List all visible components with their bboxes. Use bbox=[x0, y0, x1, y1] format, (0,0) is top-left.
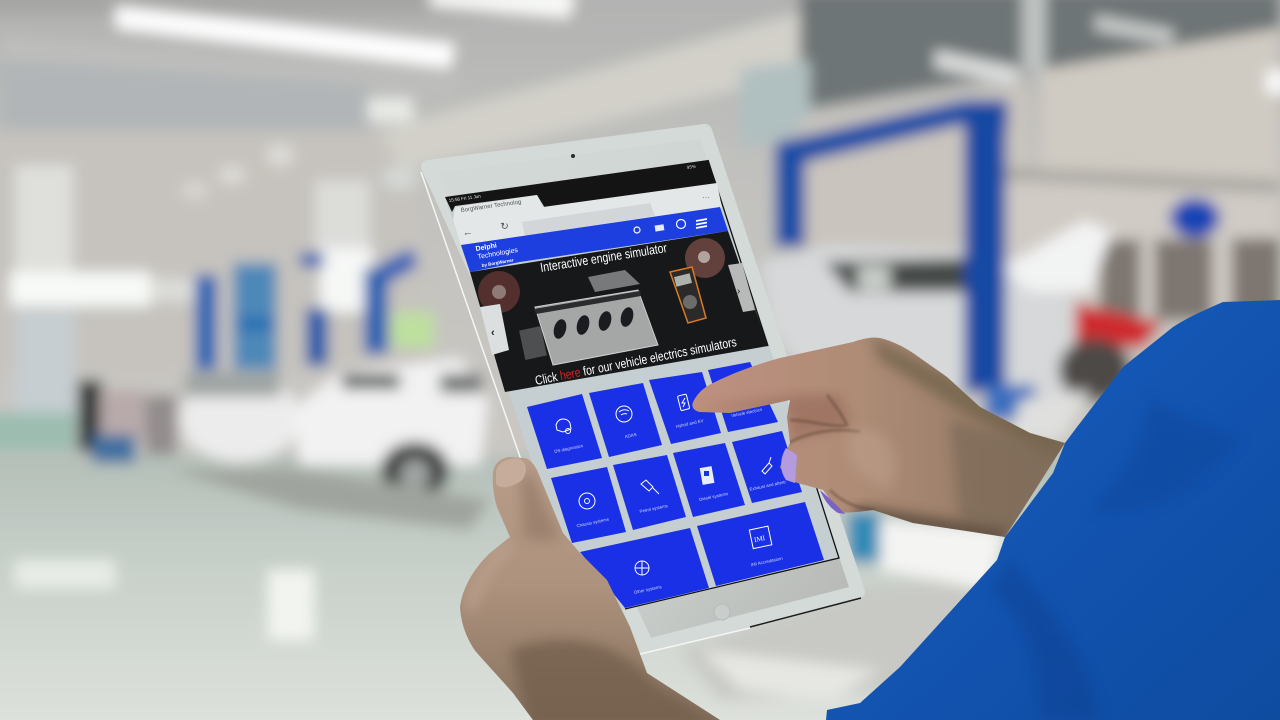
menu tile: Other systems: Other systems bbox=[633, 584, 663, 595]
menu tile: DS diagnostics: DS diagnostics bbox=[554, 443, 584, 454]
browser chrome: ··· bbox=[702, 193, 710, 202]
menu tile: Exhaust and aftertreatment: Exhaust and aftertr bbox=[749, 479, 787, 492]
wrist hair tone bbox=[950, 420, 1060, 535]
status bar: 15:56 Fri 11 Jun bbox=[448, 193, 482, 203]
menu tile: Vehicle electrics bbox=[708, 362, 778, 432]
brake disc left bbox=[478, 271, 520, 313]
wrist hair tone bbox=[510, 640, 720, 720]
menu tile: IMI Accreditation bbox=[697, 502, 824, 586]
right lift bbox=[775, 100, 1008, 247]
menu tile: Hybrid and EV: Hybrid and EV bbox=[675, 418, 704, 429]
hero call to action: Click here for our vehicle electrics simulators bbox=[534, 334, 738, 388]
carousel arrow right bbox=[728, 263, 755, 312]
browser chrome: ← bbox=[462, 227, 473, 239]
finger shadow bbox=[728, 392, 850, 439]
blue site header: Delphi bbox=[475, 242, 497, 253]
menu tile: Chassis systems: Chassis systems bbox=[576, 516, 610, 528]
floor reflections bbox=[268, 570, 314, 640]
menu tile: Exhaust and aftertreatment bbox=[732, 431, 802, 503]
browser chrome bbox=[453, 183, 722, 246]
menu tile: IMI Accreditation: IMI Accreditation bbox=[750, 556, 784, 567]
fingernail reflecting screen bbox=[781, 448, 797, 483]
blue site header: Technologies bbox=[477, 247, 519, 261]
home button bbox=[714, 604, 730, 620]
screen edge bbox=[625, 160, 839, 609]
menu tile: Other systems bbox=[580, 528, 709, 608]
hero image: engine simulator: › bbox=[737, 286, 740, 297]
thumbnail bbox=[496, 458, 526, 487]
mechanic's blue shirt sleeve bbox=[826, 300, 1280, 720]
tablet bbox=[421, 131, 861, 654]
lifts bbox=[195, 275, 217, 370]
lower shadow bbox=[850, 505, 1010, 545]
menu tile: ADAS bbox=[589, 383, 662, 457]
blue site header bbox=[461, 207, 728, 272]
menu tile: IMI Accreditation: IMI bbox=[753, 534, 766, 544]
menu tile: Diesel systems: Diesel systems bbox=[699, 491, 729, 502]
menu tile: Petrol systems bbox=[613, 455, 686, 530]
hero image: engine simulator bbox=[470, 231, 768, 392]
status bar: 95% bbox=[686, 164, 696, 170]
browser chrome: BorgWarner Technolog bbox=[460, 200, 522, 214]
menu tile: Diesel systems bbox=[673, 443, 745, 517]
right car and surroundings bbox=[1100, 238, 1280, 320]
screen background bbox=[445, 160, 839, 619]
menu tile: ADAS: ADAS bbox=[624, 432, 637, 439]
tablet bottom edge shadow bbox=[750, 598, 861, 627]
blue site header: by BorgWarner bbox=[481, 257, 514, 268]
engine block bbox=[535, 290, 658, 365]
status bar bbox=[445, 160, 717, 212]
menu tile: Chassis systems bbox=[551, 467, 626, 543]
hero image: engine simulator: ‹ bbox=[491, 327, 495, 339]
tablet edge highlight bbox=[421, 172, 750, 654]
hero heading: Interactive engine simulator bbox=[539, 240, 668, 275]
left ceiling and wall bbox=[0, 0, 500, 15]
palm highlight bbox=[850, 429, 894, 484]
tablet body bbox=[428, 131, 858, 646]
browser chrome: ↻ bbox=[500, 221, 510, 233]
shadow along top of hand bbox=[870, 335, 1070, 465]
carousel arrow left bbox=[480, 304, 509, 355]
menu tile: Vehicle electrics: Vehicle electrics bbox=[731, 407, 763, 418]
menu tile: Hybrid and EV bbox=[649, 372, 721, 444]
left hand holding tablet bbox=[450, 450, 730, 720]
brake disc right bbox=[685, 238, 725, 278]
menu tile: DS diagnostics bbox=[527, 394, 602, 469]
knuckle creases bbox=[785, 395, 875, 510]
right hand pointing at tablet bbox=[692, 338, 1065, 537]
camera dot bbox=[571, 154, 575, 158]
thumb shading bbox=[520, 470, 560, 540]
upper right: beam and windows bbox=[380, 0, 1020, 170]
multimeter bbox=[670, 267, 706, 323]
left cars bbox=[180, 374, 300, 462]
menu tile: Petrol systems: Petrol systems bbox=[639, 503, 669, 514]
